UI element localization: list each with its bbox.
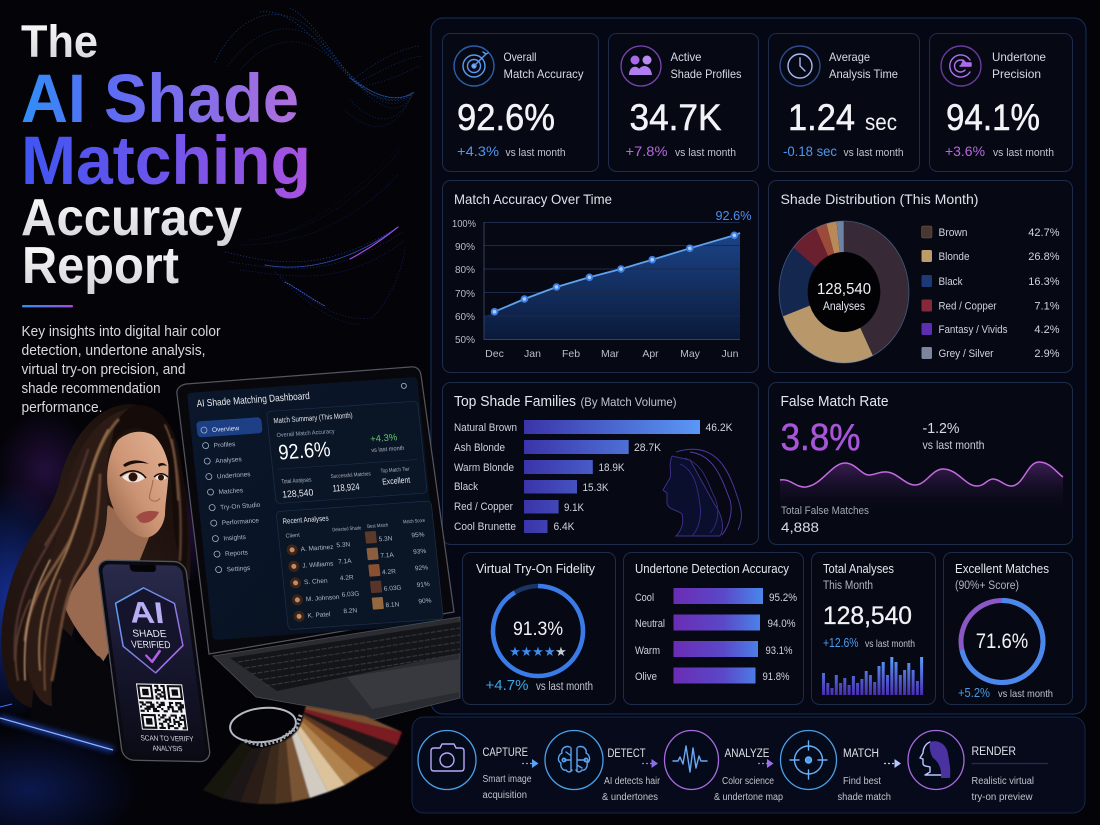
sidebar menu: Try-On Studio [220, 502, 261, 512]
sidebar menu: Insights [223, 534, 247, 543]
line chart: Dec [485, 348, 504, 360]
card: overall match accuracy: vs last month [506, 147, 566, 159]
bar chart: Neutral [635, 618, 665, 630]
intro text: performance. [22, 400, 102, 416]
step: render: RENDER [972, 746, 1016, 758]
hair swatch ring [203, 705, 402, 804]
card: active shade profiles: Shade Profiles [670, 67, 742, 81]
donut legend: Fantasy / Vivids [938, 324, 1008, 336]
sidebar menu: Matches [218, 487, 244, 496]
donut legend: 4.2% [1034, 324, 1060, 336]
bar chart: Red / Copper [454, 501, 513, 513]
line chart: Mar [601, 348, 620, 360]
hair: back mass [1, 404, 190, 709]
step: detect: AI detects hair [604, 776, 661, 787]
recent analyses table: 92% [415, 565, 429, 572]
line chart: 100% [452, 218, 476, 230]
bar chart: 28.7K [634, 442, 662, 454]
card: top shade families: (By Match Volume) [580, 395, 676, 409]
recent analyses table: 5.3N [336, 541, 351, 549]
ring gauge [961, 600, 1043, 682]
step: capture: CAPTURE [482, 747, 528, 759]
hair: front left waves [25, 408, 135, 706]
QR code [136, 683, 188, 731]
card: total analyses this month: Total Analyses [823, 562, 894, 576]
recent analyses table: 93% [413, 548, 427, 556]
title: Matching [21, 122, 311, 199]
card: active shade profiles [608, 34, 758, 172]
icon: people [621, 46, 661, 86]
card: false match rate: 3.8% [780, 417, 860, 459]
step: render: Realistic virtual [972, 776, 1034, 787]
black top [30, 620, 118, 752]
bar chart: 9.1K [564, 502, 585, 514]
line chart: Feb [562, 348, 580, 360]
card: virtual try-on fidelity [462, 552, 616, 704]
intro text: Key insights into digital hair color [22, 324, 221, 340]
title accent rule [22, 305, 73, 307]
donut legend: Black [938, 276, 963, 288]
match summary panel [267, 401, 427, 504]
step: render: try-on preview [972, 792, 1033, 803]
title: Accuracy [21, 189, 242, 247]
donut legend: 26.8% [1028, 251, 1060, 263]
recent analyses table: 7.1A [338, 558, 353, 566]
keyboard [230, 622, 460, 691]
line chart: 70% [455, 288, 475, 300]
card: match accuracy over time [442, 180, 758, 372]
woman portrait [1, 404, 190, 752]
ring gauge: ★ [509, 644, 521, 659]
face features [120, 460, 168, 523]
sidebar menu [196, 417, 277, 575]
recent analyses table: 4.2R [382, 568, 397, 576]
ring gauge: 71.6% [976, 630, 1028, 653]
ring gauge: 91.3% [513, 619, 563, 640]
card: shade distribution [768, 180, 1072, 372]
step: capture [418, 730, 538, 801]
laptop screen: AI Shade Matching Dashboard [196, 391, 310, 410]
icon: target [454, 46, 494, 86]
match summary panel: 92.6% [277, 438, 332, 465]
bar chart: Warm [635, 645, 660, 657]
wave chart [780, 462, 1063, 510]
match summary panel: 118,924 [332, 482, 361, 495]
sidebar menu: Performance [221, 517, 260, 527]
card: average analysis time: Analysis Time [829, 67, 898, 81]
donut legend: 2.9% [1034, 348, 1060, 360]
line chart: 60% [455, 311, 475, 323]
recent analyses table: 8.1N [385, 601, 400, 609]
bar chart: Cool [635, 592, 654, 604]
recent analyses table: 7.1A [380, 552, 395, 560]
panel: metrics dashboard [431, 18, 1086, 714]
card: active shade profiles: vs last month [675, 147, 736, 159]
card: overall match accuracy: 92.6% [457, 97, 555, 138]
sidebar menu: Undertones [217, 471, 252, 481]
ring gauge [493, 586, 583, 676]
donut legend: 7.1% [1034, 300, 1060, 312]
match summary panel: 128,540 [282, 487, 314, 501]
phone [97, 560, 211, 762]
card: total analyses this month: 128,540 [823, 602, 912, 630]
dotted wave decoration: lower [225, 78, 412, 324]
donut legend: Red / Copper [938, 300, 997, 312]
card: virtual try-on fidelity: vs last month [536, 681, 593, 693]
floor glow [0, 410, 215, 825]
phone notch [130, 565, 156, 572]
card: match accuracy over time: Match Accuracy Over Time [454, 191, 612, 207]
donut legend [922, 226, 1060, 360]
card: virtual try-on fidelity: Virtual Try-On Fidelity [476, 561, 595, 576]
card: false match rate: vs last month [922, 438, 984, 452]
card: virtual try-on fidelity: +4.7% [486, 677, 528, 694]
card: false match rate: Total False Matches [781, 505, 869, 517]
card: shade distribution: Shade Distribution (This Month) [780, 191, 978, 207]
card: average analysis time: 1.24 [788, 97, 855, 138]
recent analyses table [276, 501, 443, 630]
donut legend: Brown [938, 227, 968, 239]
metal ring [228, 705, 298, 745]
sidebar menu: Reports [225, 549, 249, 558]
bar chart [635, 588, 797, 684]
title: The [21, 16, 98, 67]
bar chart [454, 420, 733, 533]
recent analyses table: 4.2R [340, 574, 354, 582]
recent analyses table: 95% [411, 532, 425, 539]
card: total analyses this month: vs last month [865, 638, 915, 650]
step: match: shade match [838, 792, 891, 803]
ring clips [245, 714, 301, 745]
card: undertone precision: 94.1% [946, 97, 1040, 138]
card: undertone precision: +3.6% [945, 143, 985, 159]
step: capture: acquisition [482, 790, 527, 801]
step: match [780, 730, 901, 803]
mini bar chart [824, 657, 922, 695]
dotted wave decoration: upper [215, 8, 422, 126]
step: analyze: & undertone map [714, 792, 783, 803]
verified shield [114, 587, 187, 674]
donut legend: Grey / Silver [938, 348, 994, 360]
line chart: May [680, 348, 701, 360]
card: excellent matches: vs last month [998, 688, 1053, 700]
donut chart [779, 221, 909, 363]
intro text: shade recommendation [22, 381, 160, 397]
card: undertone detection accuracy [624, 552, 804, 704]
line chart [452, 208, 752, 360]
card: active shade profiles: +7.8% [626, 143, 668, 159]
ring gauge: ★ [544, 644, 556, 659]
donut legend: Blonde [938, 251, 970, 263]
line chart: Jun [722, 348, 739, 360]
hair highlights [15, 420, 181, 690]
match summary panel: Top Match Tier [380, 467, 410, 475]
title: AI Shade [21, 60, 299, 137]
ring gauge: ★ [521, 644, 532, 659]
step: analyze [664, 730, 783, 803]
bar chart: 46.2K [706, 422, 733, 434]
step: match: MATCH [843, 748, 879, 760]
card: false match rate: -1.2% [922, 421, 960, 437]
ring gauge: ★ [532, 644, 544, 659]
card: total analyses this month [812, 552, 936, 704]
intro text [22, 324, 221, 416]
card: excellent matches: (90%+ Score) [955, 580, 1019, 592]
step: detect: DETECT [608, 748, 646, 760]
face [107, 432, 168, 538]
sidebar menu: Overview [212, 425, 240, 434]
laptop base [213, 617, 460, 722]
step: detect: & undertones [602, 792, 658, 803]
match summary panel: +4.3% [370, 432, 398, 445]
recent analyses table: Recent Analyses [282, 514, 329, 526]
intro text: detection, undertone analysis, [22, 343, 206, 359]
card: false match rate: 4,888 [781, 520, 819, 535]
match summary panel: Excellent [382, 475, 411, 487]
recent analyses table: J. Williams [302, 561, 335, 570]
donut chart: Analyses [823, 301, 865, 313]
recent analyses table: K. Patel [307, 611, 331, 620]
card: active shade profiles: Active [670, 50, 702, 64]
phone: SCAN TO VERIFY [140, 733, 194, 743]
match summary panel: Total Analyses [281, 478, 312, 486]
card: overall match accuracy: Match Accuracy [504, 67, 584, 81]
intro text: virtual try-on precision, and [22, 362, 186, 378]
recent analyses table: S. Chen [304, 578, 328, 586]
card: overall match accuracy: +4.3% [457, 143, 499, 159]
donut legend: 16.3% [1028, 276, 1060, 288]
title [21, 16, 311, 295]
card: average analysis time: sec [865, 109, 897, 135]
step: match: Find best [843, 776, 881, 787]
recent analyses table: Match Score [403, 518, 426, 525]
recent analyses table: 6.03G [384, 585, 402, 593]
icon: hair profile silhouette [663, 449, 741, 536]
card: undertone detection accuracy: Undertone Detection Accuracy [635, 561, 789, 576]
card: undertone precision [930, 34, 1072, 172]
card: total analyses this month: This Month [823, 580, 873, 592]
bar chart: 93.1% [766, 645, 793, 657]
card: average analysis time [768, 34, 920, 172]
sidebar menu: Profiles [213, 441, 236, 450]
match summary panel: Overall Match Accuracy [276, 429, 335, 439]
neon floor line [0, 704, 113, 750]
phone: ANALYSIS [152, 744, 183, 753]
recent analyses table: Best Match [367, 522, 389, 530]
sidebar menu: Settings [226, 565, 251, 574]
donut chart: 128,540 [817, 281, 871, 298]
card: undertone precision: Undertone [992, 50, 1046, 64]
recent analyses table: 8.2N [343, 607, 358, 615]
bar chart: Natural Brown [454, 422, 517, 434]
match summary panel: Successful Matches [331, 471, 371, 480]
bar chart: Warm Blonde [454, 462, 514, 474]
bar chart: 18.9K [598, 462, 625, 474]
card: excellent matches [944, 552, 1072, 704]
laptop lid [177, 367, 454, 654]
bar chart: Black [454, 481, 478, 493]
card: excellent matches: Excellent Matches [955, 562, 1049, 576]
card: undertone precision: vs last month [993, 147, 1054, 159]
verified shield: VERIFIED [131, 640, 171, 651]
bar chart: 94.0% [768, 618, 796, 630]
donut legend: 42.7% [1028, 227, 1060, 239]
line chart: 92.6% [716, 208, 752, 223]
card: false match rate: False Match Rate [780, 394, 888, 410]
panel: process flow [412, 717, 1085, 813]
card: excellent matches: +5.2% [958, 686, 990, 700]
card: undertone precision: Precision [992, 67, 1041, 81]
icon: clock [780, 46, 820, 86]
bar chart: Olive [635, 671, 657, 683]
step: analyze: ANALYZE [724, 748, 770, 760]
step: render [908, 730, 1048, 803]
recent analyses table: A. Martinez [300, 544, 334, 553]
recent analyses table: 5.3N [378, 535, 393, 543]
recent analyses table: 91% [416, 581, 430, 589]
line chart: Jan [524, 348, 541, 360]
card: active shade profiles: 34.7K [630, 97, 722, 138]
line chart: 80% [455, 264, 475, 276]
laptop screen [187, 377, 444, 640]
recent analyses table: Detected Shade [332, 525, 362, 533]
card: overall match accuracy [442, 34, 598, 172]
recent analyses table: 6.03G [341, 591, 360, 599]
bar chart: 6.4K [554, 521, 575, 533]
card: top shade families: Top Shade Families [454, 394, 576, 410]
line chart: 90% [455, 241, 475, 253]
hair: top and right [112, 405, 188, 572]
card: false match rate [768, 382, 1072, 544]
step: capture: Smart image [482, 774, 532, 785]
match summary panel: Match Summary (This Month) [273, 411, 353, 425]
verified shield: AI [128, 597, 166, 630]
ring gauge: ★ [555, 644, 567, 659]
card: average analysis time: -0.18 sec [783, 143, 837, 159]
bar chart: 91.8% [762, 671, 790, 683]
bar chart: Ash Blonde [454, 442, 505, 454]
verified shield: SHADE [132, 629, 168, 640]
icon: undertone dial [941, 46, 981, 86]
bar chart: Cool Brunette [454, 521, 516, 533]
match summary panel: vs last month [371, 446, 405, 454]
step: detect [545, 730, 661, 803]
laptop [177, 367, 460, 722]
line chart: Apr [642, 348, 659, 360]
card: average analysis time: vs last month [844, 147, 904, 159]
sidebar menu: Analyses [215, 456, 243, 465]
trackpad [347, 659, 460, 709]
card: average analysis time: Average [829, 50, 870, 64]
line chart: 50% [455, 334, 475, 346]
recent analyses table: Client [285, 533, 301, 540]
card: total analyses this month: +12.6% [823, 636, 858, 650]
skin: neck and shoulder [62, 505, 150, 662]
bar chart: 95.2% [769, 592, 797, 604]
bar chart: 15.3K [582, 482, 609, 494]
card: overall match accuracy: Overall [504, 50, 536, 64]
step: analyze: Color science [722, 776, 774, 787]
recent analyses table: 90% [418, 598, 432, 605]
card: top shade families [442, 382, 758, 544]
title: Report [22, 237, 179, 295]
recent analyses table: M. Johnson [306, 594, 340, 603]
swatch fan [203, 706, 402, 804]
